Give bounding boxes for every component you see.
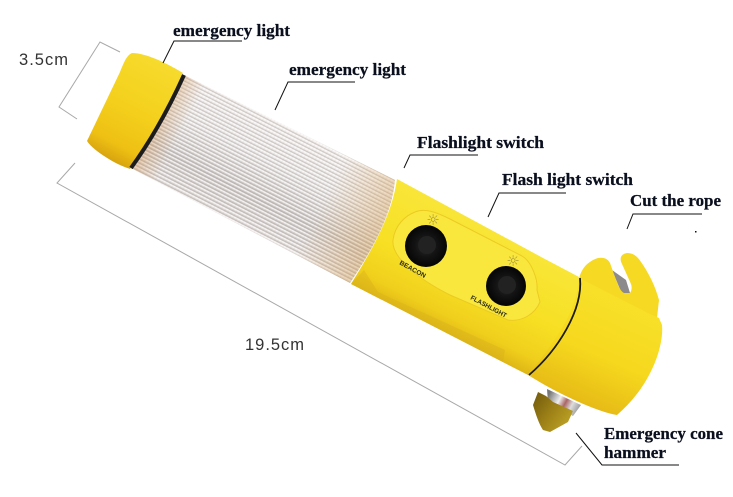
label: flash light switch: Flash light switch: [502, 170, 634, 189]
button: flashlight: [486, 266, 526, 306]
end grip: [528, 278, 662, 415]
icon: beacon sun: ☼: [426, 211, 440, 229]
label: emergency cone hammer: hammer: [604, 443, 666, 462]
rope cutter hook: [579, 253, 659, 340]
label: emergency light 2: [275, 60, 406, 110]
icon: flashlight glyph: ☼: [506, 252, 520, 270]
button: beacon: [405, 225, 447, 267]
label: emergency light 2: emergency light: [289, 60, 406, 79]
label: beacon: BEACON: [398, 260, 427, 280]
dimension bracket: diameter: [59, 42, 120, 119]
label: flashlight: FLASHLIGHT: [469, 295, 508, 320]
label: emergency cone hammer: [576, 424, 723, 465]
end cap: [87, 53, 183, 169]
hook blade: [612, 270, 630, 294]
label: cut the rope: Cut the rope: [630, 191, 721, 210]
label: emergency cone hammer: Emergency cone: [604, 424, 723, 443]
main body: [351, 179, 579, 375]
lens tube: [131, 75, 395, 283]
thin ring: [529, 278, 580, 375]
label: emergency light 1: emergency light: [173, 21, 290, 40]
switch panel: [393, 210, 540, 320]
label: flashlight switch: Flashlight switch: [417, 133, 545, 152]
dimension bracket: length: [57, 163, 582, 465]
label: emergency light 1: [163, 21, 290, 63]
dimension: 3.5cm: 3.5cm: [19, 51, 68, 69]
dimension: 19.5cm: 19.5cm: [245, 336, 304, 354]
hammer: [533, 389, 581, 432]
label: flash light switch: [488, 170, 634, 217]
flashlight product: [87, 53, 662, 432]
lower body shade: [351, 270, 528, 375]
label: flashlight switch: [404, 133, 545, 168]
black ring: [131, 75, 184, 168]
label: cut the rope: [627, 191, 721, 232]
